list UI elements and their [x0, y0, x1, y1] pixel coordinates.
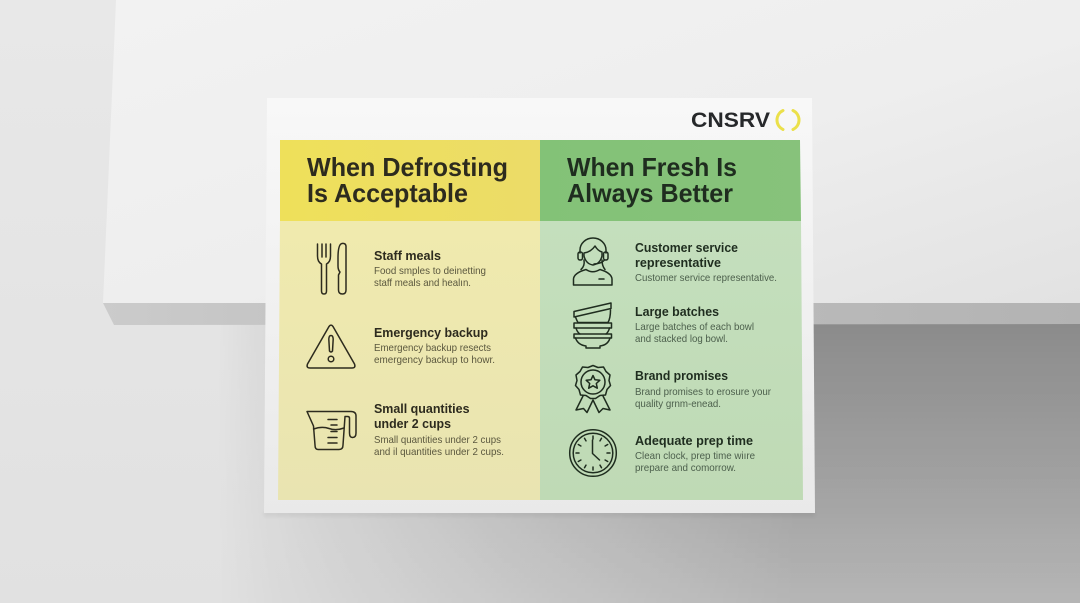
icon: logo ring — [777, 110, 799, 130]
item: large batches: and stacked log bowl. — [635, 334, 728, 345]
item: brand promises: Brand promises — [635, 368, 728, 383]
item: customer service — [574, 238, 777, 285]
item: emergency backup — [307, 325, 495, 368]
item: brand promises: Brand promises to erosure your — [635, 387, 772, 398]
heading: Always Better — [567, 178, 733, 208]
item: emergency backup: Emergency backup resects — [374, 343, 491, 354]
panel: when fresh is always better — [540, 140, 803, 500]
item: small quantities: Small quantities under 2 cups — [374, 435, 501, 446]
shelf top surface — [103, 0, 1080, 303]
item: staff meals: Staff meals — [374, 248, 441, 263]
item: small quantities — [307, 401, 504, 458]
logo: CNSRV — [691, 108, 771, 132]
heading: When Fresh Is — [567, 152, 737, 182]
icon: headset agent — [574, 238, 612, 285]
item: large batches: Large batches of each bowl — [635, 322, 754, 333]
heading — [567, 152, 737, 208]
icon: warning triangle — [307, 325, 355, 368]
item: large batches — [574, 303, 754, 348]
heading: Is Acceptable — [307, 178, 468, 208]
panel: when defrosting is acceptable — [278, 140, 541, 500]
yellow header band — [280, 140, 541, 221]
item: adequate prep time: Adequate prep time — [635, 433, 753, 448]
green header band — [540, 140, 801, 221]
item: emergency backup: Emergency backup — [374, 325, 488, 340]
yellow body — [278, 220, 540, 500]
heading: When Defrosting — [307, 152, 508, 182]
item: small quantities: and il quantities under 2 cups. — [374, 447, 504, 458]
icon: award rosette — [576, 366, 610, 412]
item: adequate prep time: prepare and comorrow. — [635, 463, 736, 474]
item: small quantities: under 2 cups — [374, 416, 451, 431]
logo — [691, 108, 799, 132]
paper shadow — [264, 512, 815, 516]
shadow beneath shelf — [252, 324, 1080, 603]
item: brand promises — [576, 366, 772, 412]
item: customer service: representative — [635, 255, 721, 270]
icon: measuring cup — [307, 412, 356, 450]
paper card — [264, 98, 815, 513]
icon: clock — [570, 430, 616, 476]
item: customer service: Customer service — [635, 240, 738, 255]
green body — [540, 220, 803, 500]
item: customer service: Customer service representative. — [635, 273, 777, 284]
item: small quantities: Small quantities — [374, 401, 470, 416]
item: brand promises: quality grnm-enead. — [635, 399, 721, 410]
item: staff meals: Food smples to deinetting — [374, 266, 486, 277]
shelf front face — [103, 303, 1080, 325]
item: adequate prep time: Clean clock, prep time wiıre — [635, 451, 755, 462]
item: emergency backup: emergency backup to howr. — [374, 355, 495, 366]
icon: fork and knife — [318, 243, 346, 294]
item: staff meals — [318, 243, 486, 294]
item: adequate prep time — [570, 430, 755, 476]
heading — [307, 152, 508, 208]
item: large batches: Large batches — [635, 304, 719, 319]
icon: stacked bowls — [574, 303, 612, 348]
item: staff meals: staff meals and healın. — [374, 278, 471, 289]
